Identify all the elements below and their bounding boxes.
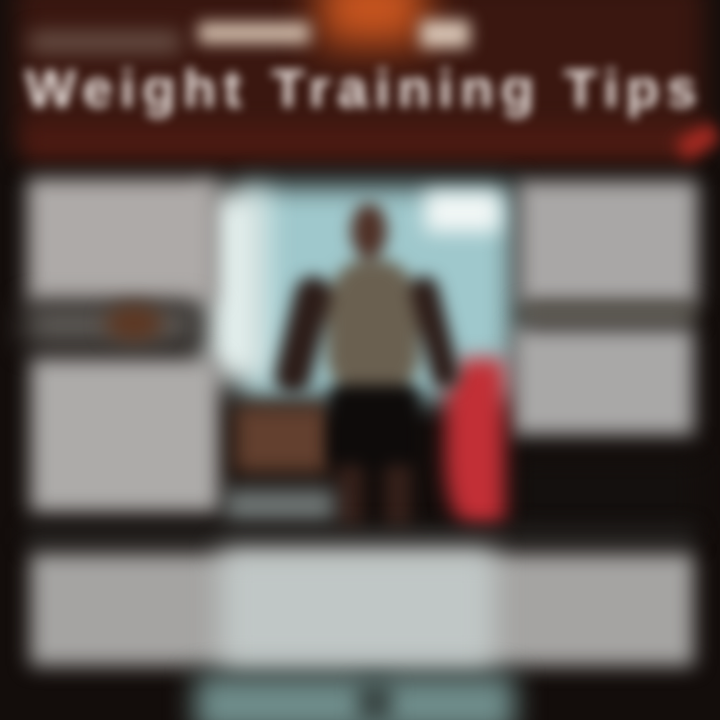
right arm <box>408 273 462 392</box>
panel: lower right <box>512 328 694 436</box>
middle floor band <box>225 488 335 524</box>
panel: top right <box>518 180 698 305</box>
dark separator band <box>25 527 695 545</box>
shorts <box>329 385 419 470</box>
panel: bottom centre <box>220 550 495 668</box>
bottom reflection <box>195 675 515 720</box>
title upper right text <box>420 20 470 48</box>
red corner accent <box>675 121 720 161</box>
left arm <box>271 272 335 398</box>
red flag <box>445 358 505 526</box>
title upper left text <box>198 22 310 44</box>
panel: lower left <box>30 358 220 513</box>
torso <box>327 260 419 388</box>
header glow <box>320 0 425 45</box>
panel: top left lower strip <box>25 305 195 345</box>
window highlight right <box>425 192 500 232</box>
dark red band <box>25 125 695 159</box>
title main line: Weight Training Tips <box>25 59 704 119</box>
right leg <box>385 465 411 531</box>
dark block lower right <box>510 455 700 530</box>
header background <box>15 0 705 155</box>
panel: top left <box>27 178 217 303</box>
left leg <box>337 465 363 531</box>
figure silhouette <box>263 193 470 528</box>
panel: upper right divider strip <box>520 305 695 323</box>
central window panel <box>240 185 515 400</box>
bottom reflection shadow <box>358 682 392 720</box>
head <box>351 203 387 259</box>
window highlight left <box>205 190 267 380</box>
panel: bottom row <box>30 553 694 666</box>
title faint left text <box>30 32 180 52</box>
icon: brown object <box>105 305 163 341</box>
suitcase <box>234 405 330 473</box>
